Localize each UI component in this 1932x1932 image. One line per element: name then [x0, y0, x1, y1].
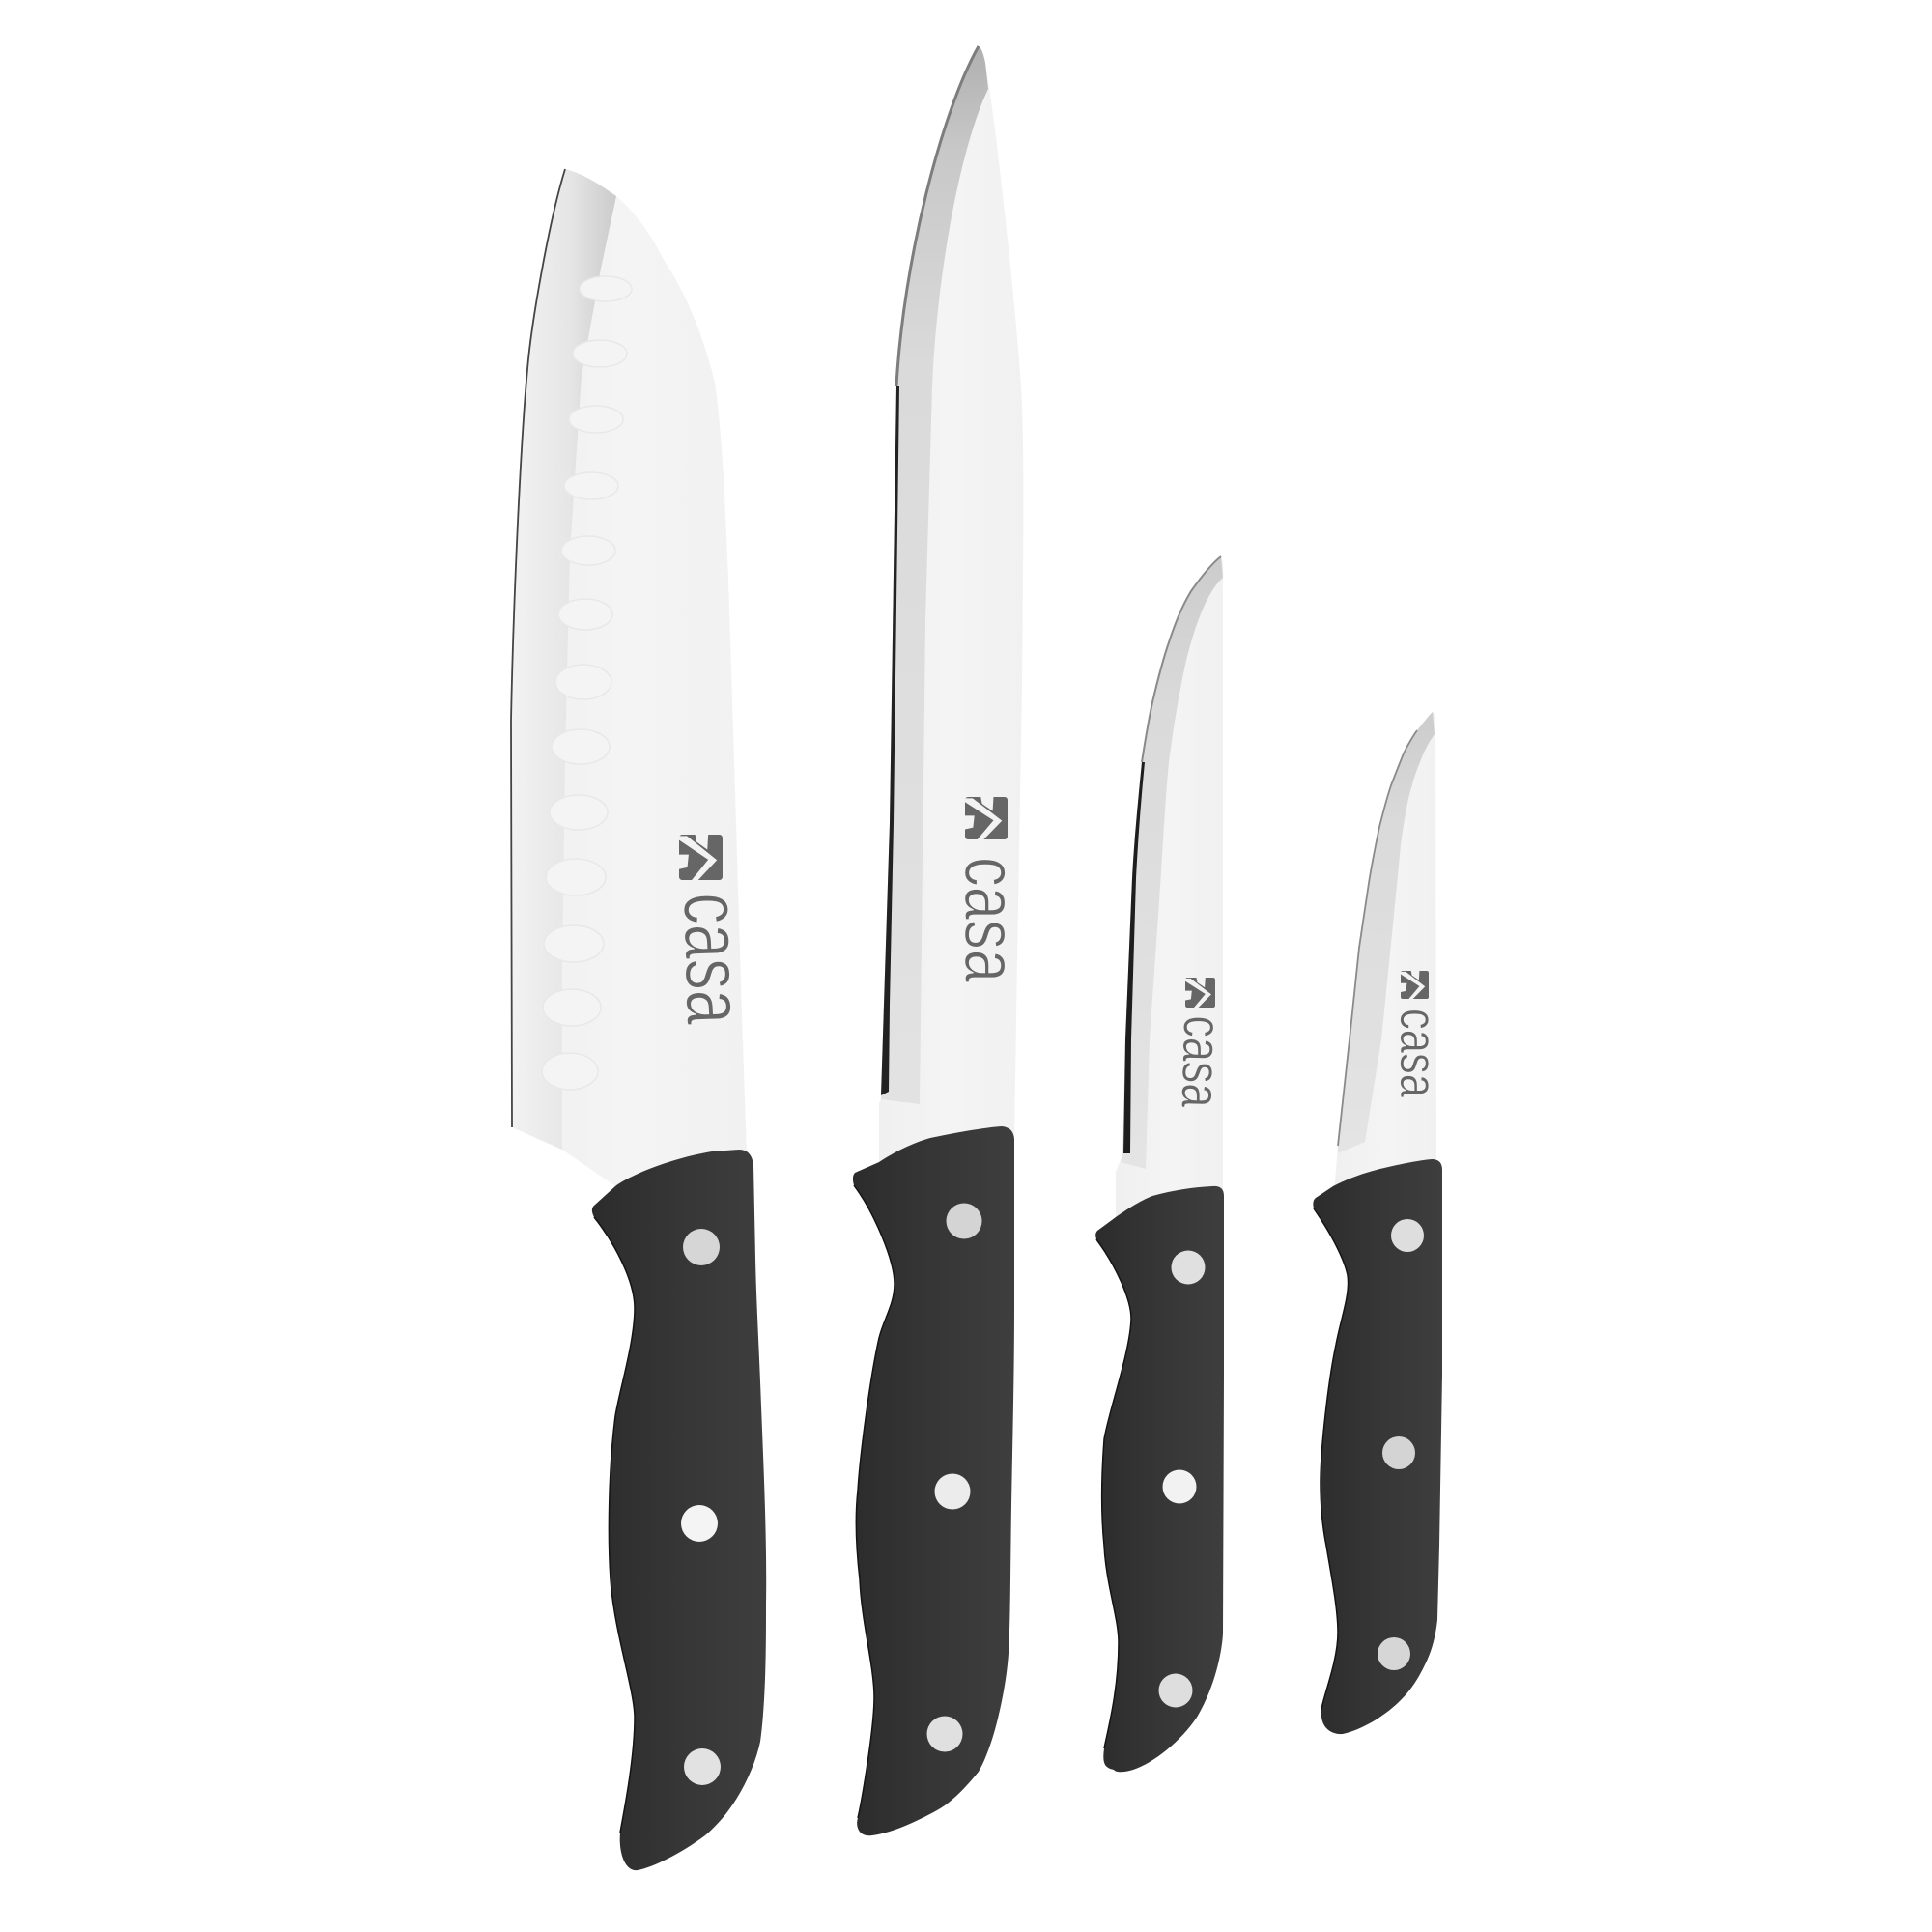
knife 3: utility — [1095, 556, 1234, 1772]
paring handle — [1313, 1159, 1442, 1734]
santoku rivets — [681, 1229, 721, 1785]
knife 4: paring — [1313, 712, 1447, 1734]
paring logo wordmark: casa — [1389, 1009, 1447, 1098]
slicer rivets — [927, 1204, 981, 1752]
santoku logo icon — [679, 835, 723, 880]
utility logo wordmark: casa — [1170, 1015, 1234, 1109]
paring blade — [1334, 712, 1436, 1193]
santoku hollow-edge dimples — [542, 276, 632, 1090]
slicer handle — [853, 1126, 1014, 1835]
slicer logo wordmark: casa — [949, 857, 1032, 982]
paring logo icon — [1401, 971, 1429, 999]
santoku blade — [511, 169, 747, 1188]
slicer blade — [879, 46, 1023, 1169]
utility logo icon — [1185, 978, 1215, 1008]
knife 1: santoku — [511, 169, 766, 1870]
santoku logo wordmark: casa — [666, 892, 761, 1026]
paring rivets — [1378, 1219, 1424, 1670]
knife 2: slicer — [853, 46, 1032, 1835]
slicer logo icon — [965, 797, 1008, 839]
santoku handle — [592, 1150, 766, 1870]
utility rivets — [1159, 1250, 1206, 1708]
utility handle — [1095, 1186, 1224, 1772]
utility blade — [1116, 556, 1223, 1222]
